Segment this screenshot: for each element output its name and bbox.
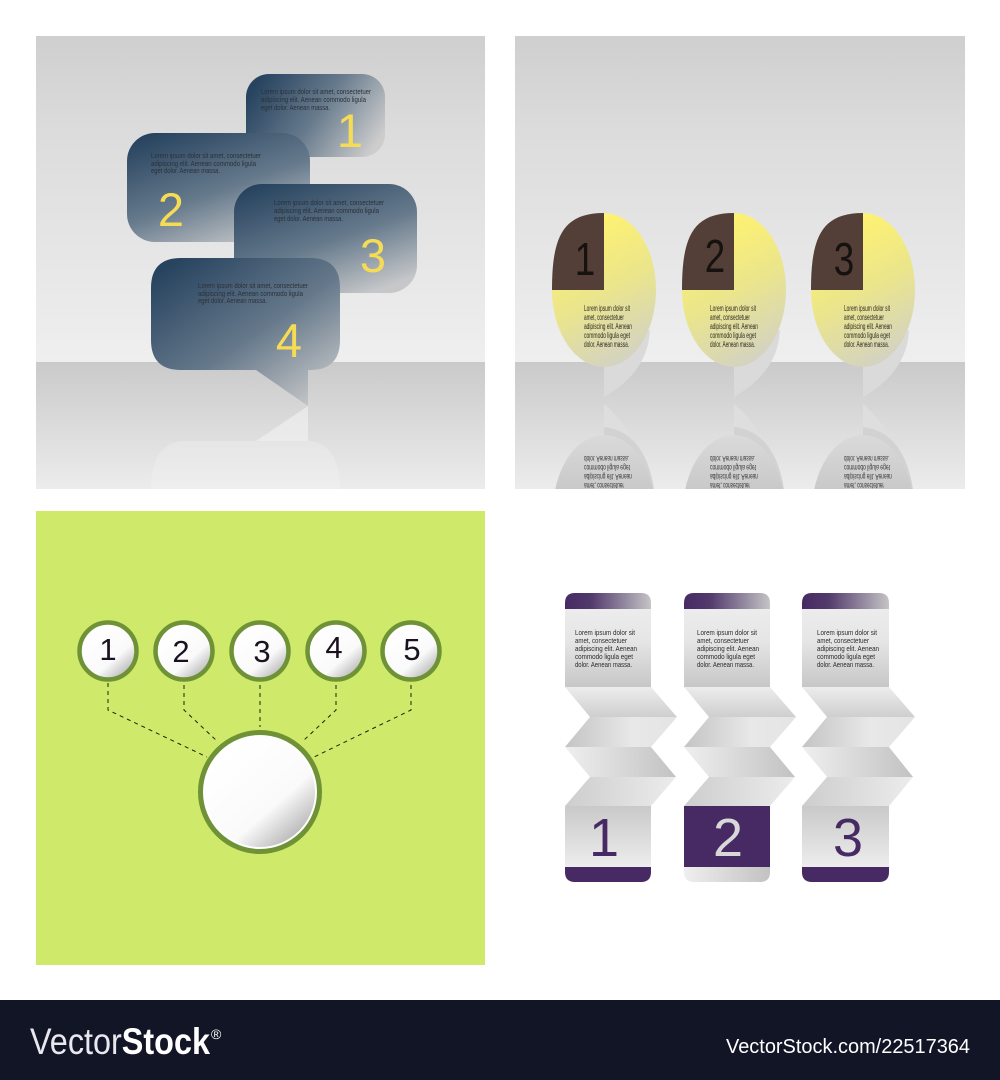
bubble 2: 2 <box>158 183 184 236</box>
oval 3: Lorem ipsum dolor sit <box>844 304 890 313</box>
oval 2: commodo ligula eget <box>710 463 756 472</box>
oval 3: adipiscing elit. Aenean <box>844 472 892 481</box>
circle 5 <box>382 622 440 680</box>
oval 2: Lorem ipsum dolor sit <box>710 304 756 313</box>
bubble 3: Lorem ipsum dolor sit amet, consectetuer <box>274 198 384 207</box>
oval 3: adipiscing elit. Aenean <box>844 322 892 331</box>
bubble 1: eget dolor. Aenean massa. <box>261 103 330 112</box>
oval 1: commodo ligula eget <box>584 463 630 472</box>
oval 1: commodo ligula eget <box>584 331 630 340</box>
ribbon 2: commodo ligula eget <box>697 652 756 661</box>
bubble 2: Lorem ipsum dolor sit amet, consectetuer <box>151 151 261 160</box>
oval 2: adipiscing elit. Aenean <box>710 472 758 481</box>
panel: speech bubbles <box>36 36 485 489</box>
bubble 1: Lorem ipsum dolor sit amet, consectetuer <box>261 87 371 96</box>
oval 3: amet, consectetuer <box>844 313 884 322</box>
panel: folded ribbons <box>565 593 915 882</box>
ribbon 2: amet, consectetuer <box>697 636 749 645</box>
circle 1 <box>80 622 136 680</box>
ribbon 3: dolor. Aenean massa. <box>817 660 874 669</box>
oval 3 <box>811 213 915 489</box>
bubble 4 <box>151 258 340 406</box>
oval 3: commodo ligula eget <box>844 331 890 340</box>
circle 1: 1 <box>99 632 117 667</box>
bubble 3: 3 <box>360 229 386 282</box>
oval 2: 2 <box>705 230 725 282</box>
circle 3 <box>232 622 288 680</box>
bubble 4: adipiscing elit. Aenean commodo ligula <box>198 289 304 298</box>
ribbon 1: 1 <box>589 808 619 868</box>
panel: circle hub diagram <box>36 511 485 965</box>
ribbon 3: adipiscing elit. Aenean <box>817 644 879 653</box>
oval 1: adipiscing elit. Aenean <box>584 472 632 481</box>
circle 2 <box>156 622 212 680</box>
oval 1: amet, consectetuer <box>584 313 624 322</box>
footer id: VectorStock.com/22517364 <box>726 1036 970 1058</box>
bubble 2: adipiscing elit. Aenean commodo ligula <box>151 159 257 168</box>
oval 2: dolor. Aenean massa. <box>710 340 755 349</box>
oval 1: amet, consectetuer <box>584 481 624 490</box>
bubble reflection <box>151 406 340 489</box>
circle 4 <box>308 622 364 680</box>
oval 2: commodo ligula eget <box>710 331 756 340</box>
ribbon 3: Lorem ipsum dolor sit <box>817 628 878 637</box>
oval 3: 3 <box>834 233 854 285</box>
ribbon 1 <box>565 593 677 882</box>
ribbon 3: amet, consectetuer <box>817 636 869 645</box>
footer logo: VectorStock <box>30 1021 210 1062</box>
bubble 3: eget dolor. Aenean massa. <box>274 214 343 223</box>
circle 2: 2 <box>172 634 190 669</box>
central circle <box>200 732 320 852</box>
circle 4: 4 <box>325 630 343 665</box>
ribbon 3 <box>802 593 915 882</box>
oval 2: dolor. Aenean massa. <box>710 454 755 463</box>
oval 3: dolor. Aenean massa. <box>844 454 889 463</box>
bubble 4: eget dolor. Aenean massa. <box>198 296 267 305</box>
ribbon 2 <box>684 593 796 882</box>
footer bar <box>0 1000 1000 1080</box>
ribbon 1: adipiscing elit. Aenean <box>575 644 637 653</box>
bubble 1: adipiscing elit. Aenean commodo ligula <box>261 95 367 104</box>
oval 1 <box>552 213 656 489</box>
ribbon 2: Lorem ipsum dolor sit <box>697 628 758 637</box>
ribbon 2: dolor. Aenean massa. <box>697 660 754 669</box>
oval 2: adipiscing elit. Aenean <box>710 322 758 331</box>
bubble 2 <box>127 133 310 242</box>
oval 3: dolor. Aenean massa. <box>844 340 889 349</box>
circle 5: 5 <box>403 632 421 667</box>
oval 1: dolor. Aenean massa. <box>584 340 629 349</box>
ribbon 1: amet, consectetuer <box>575 636 627 645</box>
oval 1: adipiscing elit. Aenean <box>584 322 632 331</box>
oval 1: 1 <box>575 233 595 285</box>
registered mark: ® <box>211 1026 222 1042</box>
ribbon 1: Lorem ipsum dolor sit <box>575 628 636 637</box>
ribbon 3: 3 <box>833 808 863 868</box>
oval 2: amet, consectetuer <box>710 481 750 490</box>
oval 1: Lorem ipsum dolor sit <box>584 304 630 313</box>
bubble 1: 1 <box>337 104 363 157</box>
ribbon 2: adipiscing elit. Aenean <box>697 644 759 653</box>
ribbon 1: dolor. Aenean massa. <box>575 660 632 669</box>
ribbon 3: commodo ligula eget <box>817 652 876 661</box>
dashed connectors <box>108 683 411 757</box>
panel: ovals <box>515 36 965 489</box>
bubble 1 <box>246 74 385 157</box>
bubble 3 <box>234 184 417 293</box>
oval 2 <box>682 213 786 489</box>
oval 3: commodo ligula eget <box>844 463 890 472</box>
bubble 2: eget dolor. Aenean massa. <box>151 166 220 175</box>
oval 2: amet, consectetuer <box>710 313 750 322</box>
circle 3: 3 <box>253 634 271 669</box>
ribbon 1: commodo ligula eget <box>575 652 634 661</box>
bubble 3: adipiscing elit. Aenean commodo ligula <box>274 206 380 215</box>
bubble 4: Lorem ipsum dolor sit amet, consectetuer <box>198 281 308 290</box>
oval 3: amet, consectetuer <box>844 481 884 490</box>
oval 1: dolor. Aenean massa. <box>584 454 629 463</box>
bubble 4: 4 <box>276 314 302 367</box>
ribbon 2: 2 <box>713 808 743 868</box>
